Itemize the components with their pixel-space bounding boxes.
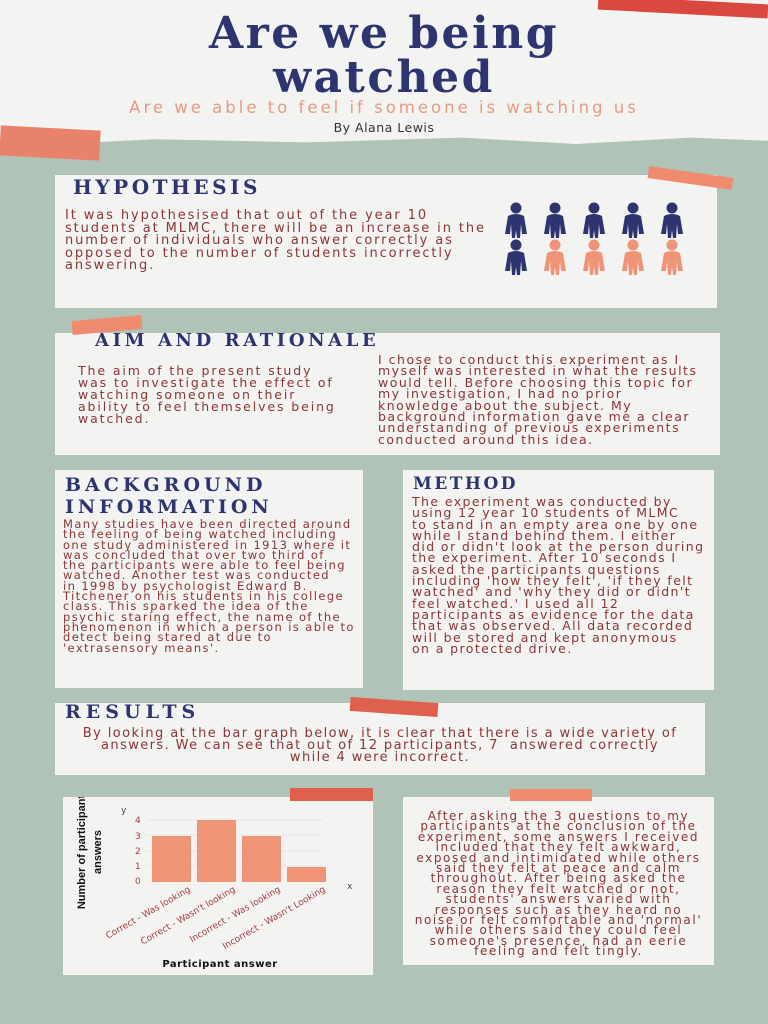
text: findings: responses such as they heard no <box>435 903 682 917</box>
decorative tape aim <box>72 315 142 335</box>
heading: aim: AIM AND RATIONALE <box>95 330 379 351</box>
text: findings: reason they felt watched or not, <box>436 882 681 896</box>
text: background: psychic staring effect, the name of the <box>63 610 341 624</box>
text: method: while I stand behind them. I either <box>412 528 676 543</box>
heading: hypothesis: HYPOTHESIS <box>73 175 261 199</box>
panel: aim and rationale <box>55 333 720 455</box>
heading: background <box>65 474 273 518</box>
bar chart: Correct - Wasn't looking <box>139 885 238 947</box>
text: rationale: understanding of previous experiments <box>378 420 680 435</box>
decorative tape left <box>0 125 101 161</box>
text: rationale: I chose to conduct this experiment as I <box>378 352 680 367</box>
heading: background: BACKGROUND <box>65 474 266 496</box>
bar chart: answers <box>92 830 104 874</box>
panel: background information <box>55 470 363 688</box>
text: background: was concluded that over two third of <box>63 548 325 562</box>
bar chart: 4 <box>135 816 141 826</box>
text: background: one study administered in 1913 where it <box>63 538 351 552</box>
text: background: class. This sparked the idea of the <box>63 599 309 613</box>
bar chart: 1 <box>135 862 141 872</box>
title <box>208 14 556 92</box>
text: findings <box>415 809 702 958</box>
text: rationale: my investigation, I had no prior <box>378 386 622 401</box>
panel: hypothesis <box>55 175 717 308</box>
subtitle: Are we able to feel if someone is watching us <box>129 98 639 117</box>
text: hypothesis: answering. <box>65 258 155 273</box>
bar chart: Participant answer <box>162 959 278 970</box>
text: background: phenomenon in which a person is able to <box>63 620 355 634</box>
text: findings: someone's presence, had an eerie <box>430 934 687 948</box>
text: aim: ability to feel themselves being <box>78 399 336 414</box>
text: method <box>412 494 704 656</box>
text: hypothesis <box>65 208 486 273</box>
panel: chart <box>63 797 373 975</box>
decorative tape hypothesis <box>648 166 733 190</box>
text: results <box>83 726 677 765</box>
decorative tape findings <box>510 789 592 801</box>
text: background: 'extrasensory means'. <box>63 641 220 655</box>
text: findings: said they felt at peace and calm <box>436 861 681 875</box>
bar chart: Incorrect - Was looking <box>188 885 282 945</box>
text: background: the participants were able to feel being <box>63 558 346 572</box>
text: method: the experiment. After 10 seconds I <box>412 550 676 565</box>
title: watched <box>273 52 495 103</box>
text: method: did or didn't look at the person during <box>412 539 704 554</box>
text: method: using 12 year 10 students of MLMC <box>412 505 679 520</box>
text: findings: included that they felt awkward, <box>436 840 681 854</box>
bar chart: Incorrect - Wasn't Looking <box>221 885 328 952</box>
text: method: feel watched.' I used all 12 <box>412 596 619 611</box>
text: method: asked the participants questions <box>412 562 661 577</box>
text: aim <box>78 363 336 426</box>
bar chart: Correct - Was looking <box>104 885 192 942</box>
text: findings: while others said they could feel <box>435 923 682 937</box>
bar chart <box>76 797 353 970</box>
text: rationale: background information gave me a clear <box>378 409 690 424</box>
text: findings: experiment, some answers I received <box>418 830 699 844</box>
text: method: including 'how they felt', 'if they felt <box>412 573 693 588</box>
bar chart: y <box>121 806 127 816</box>
text: hypothesis: students at MLMC, there will be an increase in the <box>65 220 486 236</box>
panel: results <box>55 703 705 775</box>
icon: people <box>505 202 683 275</box>
text: findings: exposed and intimidated while others <box>416 851 701 865</box>
text: hypothesis: opposed to the number of students incorrectly <box>65 246 454 260</box>
text: background: watched. Another test was conducted <box>63 568 330 582</box>
decorative tape results <box>350 697 438 717</box>
text: background: detect being stared at due to <box>63 630 272 644</box>
heading: background: INFORMATION <box>65 496 273 518</box>
bar chart: Number of participant <box>76 797 88 909</box>
text: background: Many studies have been directed around <box>63 517 352 531</box>
text: results: while 4 were incorrect. <box>290 750 470 765</box>
text: findings: participants at the conclusion of the <box>420 819 697 833</box>
decorative tape top right <box>598 0 768 18</box>
bar chart: 2 <box>135 847 141 857</box>
text: results: By looking at the bar graph below, it is clear that there is a wide variety of <box>83 726 677 741</box>
text: background <box>62 517 355 655</box>
text: rationale: conducted around this idea. <box>378 432 594 447</box>
panel: findings <box>403 797 714 965</box>
text: background: in 1998 by psychologist Edward B. <box>63 579 308 593</box>
text: hypothesis: It was hypothesised that out of the year 10 <box>65 208 428 223</box>
bar chart: 3 <box>135 832 141 842</box>
text: method: that was observed. All data recorded <box>412 618 693 633</box>
text: findings: noise or felt comfortable and 'normal' <box>415 913 702 927</box>
heading: results: RESULTS <box>65 701 200 723</box>
heading: method: METHOD <box>413 474 518 494</box>
text: aim: watched. <box>78 411 150 426</box>
text: findings: students' answers varied with <box>445 892 672 906</box>
text: method: The experiment was conducted by <box>412 494 672 509</box>
text: method: will be stored and kept anonymous <box>412 630 678 645</box>
text: method: on a protected drive. <box>412 641 573 656</box>
text: rationale: would tell. Before choosing this topic for <box>378 375 693 390</box>
text: results: answers. We can see that out of 12 participants, 7 answered correctly <box>101 738 659 753</box>
text: background: Titchener on his students in his college <box>63 589 344 603</box>
text: aim: was to investigate the effect of <box>78 375 334 390</box>
text: hypothesis: number of individuals who answer correctly as <box>65 233 454 248</box>
title: Are we being <box>209 8 559 59</box>
text: findings: throughout. After being asked the <box>431 871 686 885</box>
text: rationale: knowledge about the subject. My <box>378 398 632 413</box>
text: method: watched' and 'why they did or didn't <box>412 584 691 599</box>
text: background: the feeling of being watched including <box>63 527 337 541</box>
text: findings: feeling and felt tingly. <box>474 944 643 958</box>
decorative tape chart <box>290 788 373 801</box>
header area <box>0 0 768 160</box>
byline: By Alana Lewis <box>334 120 434 135</box>
panel: method <box>403 470 714 690</box>
bar chart: x <box>347 882 353 892</box>
bar chart: 0 <box>135 877 141 887</box>
text: method: participants as evidence for the data <box>412 607 695 622</box>
text: rationale: myself was interested in what the results <box>378 363 697 378</box>
text: aim: The aim of the present study <box>78 363 312 378</box>
text: findings: After asking the 3 questions to my <box>428 809 689 823</box>
text: rationale <box>378 352 697 447</box>
text: aim: watching someone on their <box>78 387 296 402</box>
text: method: to stand in an empty area one by one <box>412 517 698 532</box>
